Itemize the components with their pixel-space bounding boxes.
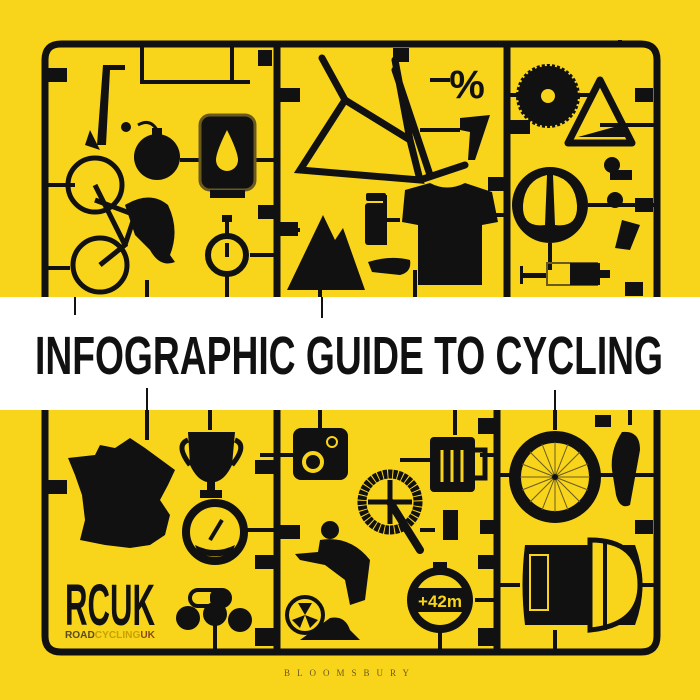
icon: helmet [522,540,642,630]
icon: camera [293,428,348,480]
icon: cassette [518,66,578,126]
icon: stopwatch +42m [407,562,473,633]
icon: lungs [512,167,588,243]
icon: syringe [520,263,610,285]
icon: derailleurs [604,157,640,250]
sprue frame [45,44,657,652]
icon: cyclist on bike [68,158,175,292]
icon: beer mug [430,437,485,492]
icon: mountains [287,215,365,290]
icon: bike frame [300,58,465,180]
white title band [0,297,700,410]
icon: stopwatch small [208,215,246,274]
icon: pills [176,590,252,632]
icon: blood bag [200,115,255,198]
icon: shoe [368,258,410,275]
icon: bottle [365,193,387,245]
icon: trophy [182,432,241,498]
icon: seatpost [85,65,125,150]
icon: chainring crank [362,474,420,550]
icon: gradient triangle [568,80,632,143]
icon: indoor cyclist [287,521,370,640]
icon: shoe side [612,432,640,506]
logo: RCUK: ROADCYCLINGUK [65,630,156,641]
icon: percent: % [449,63,485,107]
icon: brake lever [460,115,490,160]
icon: speedometer [186,503,244,561]
icon: chip [443,510,458,540]
icon: France map [68,438,175,548]
publisher: BLOOMSBURY [284,668,416,678]
icon: stopwatch +42m: +42m [418,592,462,611]
icon: bomb [121,122,180,180]
logo: RCUK: RCUK [65,573,155,638]
icon: jersey [402,183,498,285]
icon: wheel [515,437,595,517]
sprue tabs [45,48,653,646]
logo: RCUK [65,573,156,641]
